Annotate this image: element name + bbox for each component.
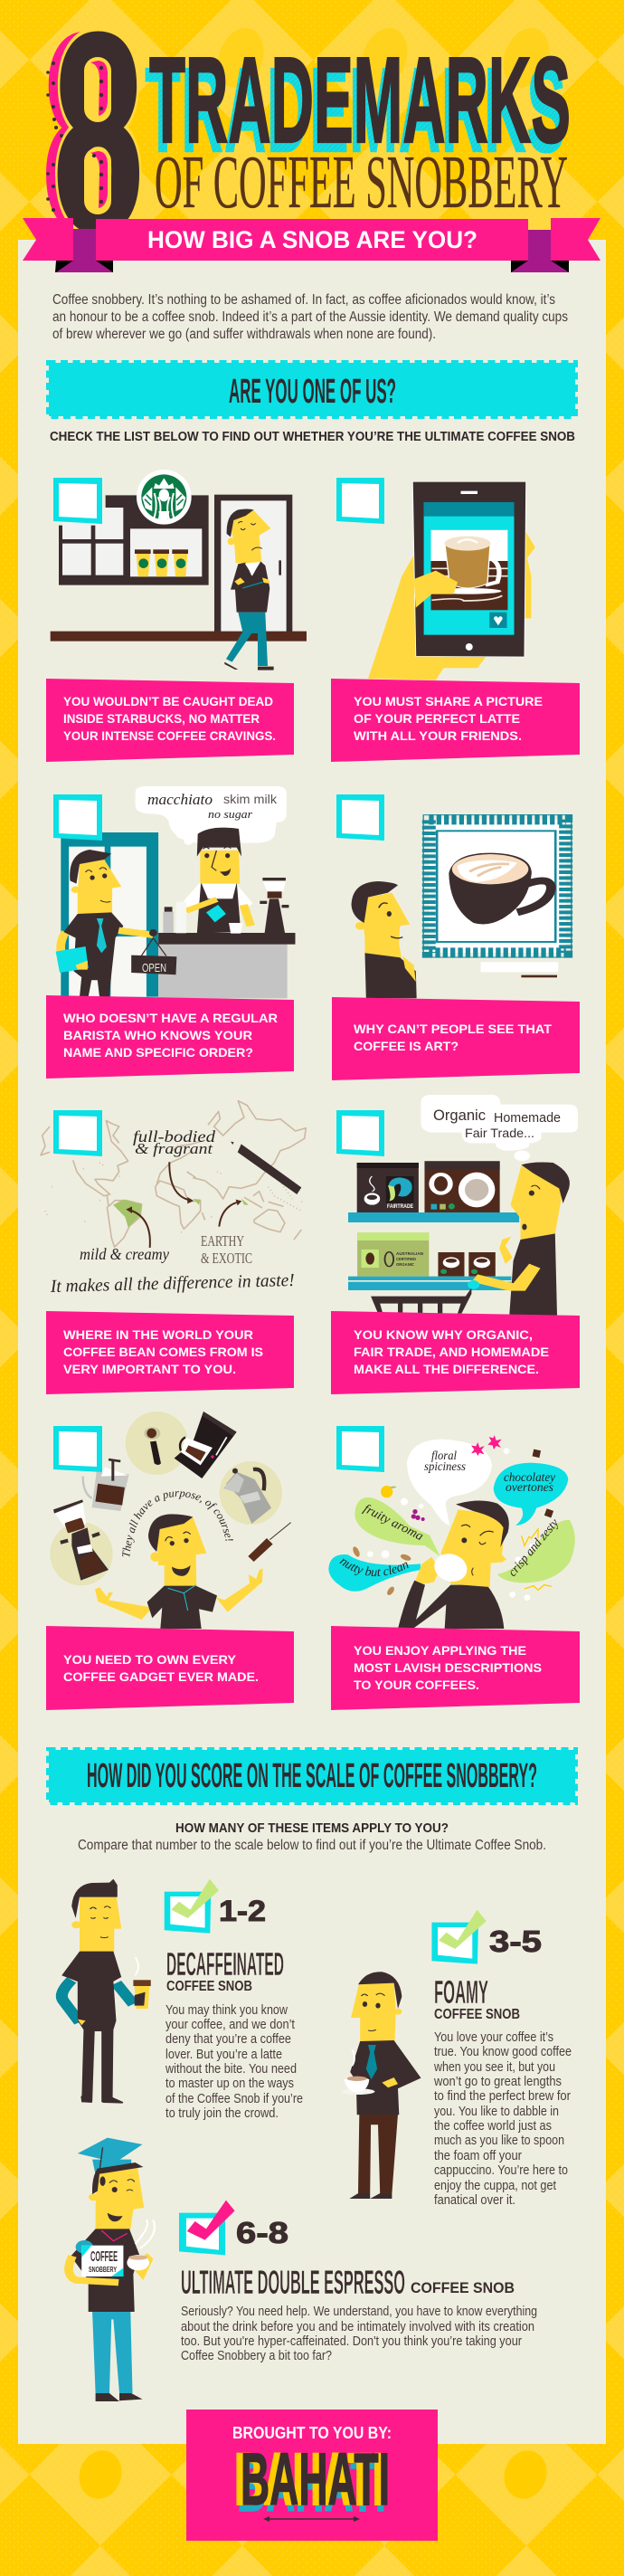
heading stamp: score scale [49, 1750, 575, 1802]
illustration: world map with coffee origins: EARTHY [201, 1232, 244, 1250]
bahati logo: BAHATI [241, 2438, 390, 2521]
caption 4: COFFEE IS ART? [354, 1039, 459, 1053]
illustration: barista and regular customer [56, 786, 295, 998]
score 1-2: without the bite. You need [165, 2061, 297, 2077]
checkboxes row 3 [53, 1110, 384, 1156]
score 3-5: you. You like to dabble in [434, 2104, 559, 2119]
illustration: organic and fair trade shelves: Organic [433, 1107, 486, 1124]
score 3-5: true. You know good coffee [434, 2044, 572, 2059]
illustration: barista and regular customer: OPEN [142, 961, 166, 974]
caption 4: WHY CAN’T PEOPLE SEE THAT [354, 1022, 552, 1036]
score 6-8: about the drink before you and be intimately involved with its creation [181, 2319, 534, 2334]
caption 2: YOU MUST SHARE A PICTURE [354, 694, 543, 708]
caption 3: WHO DOESN’T HAVE A REGULAR [63, 1011, 278, 1025]
score 6-8: COFFEE SNOB [411, 2279, 515, 2296]
score 1-2: You may think you know [165, 2002, 288, 2018]
illustration: organic and fair trade shelves: FAIRTRADE [387, 1204, 413, 1210]
caption 3: BARISTA WHO KNOWS YOUR [63, 1028, 252, 1042]
score 3-5: when you see it, but you [433, 2059, 555, 2075]
illustration: world map with coffee origins [41, 1101, 306, 1297]
arrow under logo [263, 2516, 360, 2522]
caption 8: YOU ENJOY APPLYING THE [354, 1643, 526, 1658]
score 6-8 [179, 2201, 537, 2363]
bahati logo [234, 2438, 390, 2527]
bahati logo: BAHATI [234, 2438, 383, 2521]
caption 2: WITH ALL YOUR FRIENDS. [354, 728, 522, 743]
score 1-2: 1-2 [219, 1895, 266, 1927]
caption 2 [331, 679, 580, 762]
character: decaffeinated snob [61, 1879, 151, 2104]
character: foamy snob [342, 1972, 421, 2199]
illustration: organic and fair trade shelves: ORGANIC [396, 1262, 415, 1267]
illustration: lavish flavor descriptions: spiciness [424, 1460, 466, 1474]
score 1-2: deny that you’re a coffee [165, 2031, 291, 2047]
caption 1: YOU WOULDN’T BE CAUGHT DEAD [63, 694, 273, 708]
icon: tick box 3-5 [431, 1910, 487, 1964]
illustration: latte art in frame [352, 815, 572, 998]
caption 5: VERY IMPORTANT TO YOU. [63, 1362, 236, 1376]
caption 6: MAKE ALL THE DIFFERENCE. [354, 1362, 539, 1376]
score 1-2: of the Coffee Snob if you’re [165, 2091, 303, 2106]
caption 8: TO YOUR COFFEES. [354, 1678, 479, 1692]
scale intro: HOW MANY OF THESE ITEMS APPLY TO YOU? [175, 1820, 449, 1836]
heading stamp: are you one of us [49, 362, 575, 416]
score 3-5: the foam off your [434, 2148, 522, 2163]
illustration: barista and regular customer: no sugar [208, 807, 253, 821]
score 3-5: FOAMY [434, 1973, 488, 2010]
checkboxes row 2 [53, 794, 384, 841]
score 6-8: too. But you're hyper-caffeinated. Don't you think you’re taking your [181, 2334, 522, 2349]
caption 7: YOU NEED TO OWN EVERY [63, 1652, 237, 1667]
caption 4 [332, 997, 580, 1080]
score 3-5: the coffee world just as [434, 2118, 552, 2134]
score 1-2: to truly join the crowd. [165, 2105, 279, 2121]
caption 1: INSIDE STARBUCKS, NO MATTER [63, 711, 260, 726]
illustration: organic and fair trade shelves: Homemade [494, 1110, 561, 1126]
score 3-5: 3-5 [489, 1925, 542, 1958]
character: ultimate double espresso snob: COFFEE [90, 2249, 118, 2265]
caption 3: NAME AND SPECIFIC ORDER? [63, 1045, 253, 1060]
caption 5: COFFEE BEAN COMES FROM IS [63, 1345, 263, 1359]
illustration: world map with coffee origins: It makes all the difference in taste! [50, 1270, 295, 1297]
icon: pink tick box 6-8 [179, 2201, 235, 2255]
score 6-8: Coffee Snobbery a bit too far? [181, 2348, 332, 2363]
illustration: world map with coffee origins: & fragrant [135, 1140, 213, 1157]
footer: brought to you by: BROUGHT TO YOU BY: [232, 2424, 392, 2442]
caption 6 [331, 1311, 580, 1394]
score 1-2: to master up on the ways [165, 2076, 294, 2091]
score 3-5: to find the perfect brew for [434, 2088, 571, 2104]
score 1-2: your coffee, and we don’t [165, 2017, 296, 2032]
illustration: phone latte photo [368, 481, 535, 680]
illustration: world map with coffee origins: full-bodied [133, 1127, 216, 1145]
illustration: lavish flavor descriptions: floral [431, 1450, 457, 1463]
score 3-5 [431, 1910, 572, 2208]
illustration: barista and regular customer: macchiato [147, 791, 213, 808]
illustration: lavish flavor descriptions: fruity aroma [361, 1502, 425, 1544]
scale intro [78, 1820, 546, 1853]
illustration: world map with coffee origins: mild & creamy [80, 1245, 169, 1263]
intro text: Coffee snobbery. It’s nothing to be ashamed of. In fact, as coffee aficionados would know, it’s [52, 292, 555, 308]
caption 5 [46, 1311, 294, 1394]
illustration: juggling coffee gadgets: They all have a purpose, of course! [122, 1491, 233, 1557]
illustration: organic and fair trade shelves: Fair Trade... [465, 1126, 534, 1140]
illustration: lavish flavor descriptions: chocolatey [504, 1471, 556, 1485]
ribbon banner [23, 218, 600, 272]
intro text: of brew wherever we go (and suffer withdrawals when none are found). [52, 327, 436, 342]
caption 6: YOU KNOW WHY ORGANIC, [354, 1327, 533, 1342]
footer: brought to you by [186, 2410, 438, 2541]
checkboxes row 1 [53, 478, 384, 524]
illustration: organic and fair trade shelves: CERTIFIED [396, 1257, 417, 1261]
score 1-2: DECAFFEINATED [166, 1945, 284, 1982]
caption 2: OF YOUR PERFECT LATTE [354, 711, 520, 726]
check list instruction: CHECK THE LIST BELOW TO FIND OUT WHETHER YOU’RE THE ULTIMATE COFFEE SNOB [50, 430, 575, 444]
checkboxes row 4 [53, 1426, 384, 1472]
illustration: starbucks storefront [51, 470, 307, 670]
score 3-5: fanatical over it. [434, 2192, 515, 2208]
character: ultimate double espresso snob: SNOBBERY [89, 2266, 117, 2274]
bahati logo: BAHATI [237, 2445, 386, 2527]
icon: tick box 1-2 [165, 1879, 219, 1934]
character: ultimate double espresso snob [69, 2138, 155, 2401]
caption 7: COFFEE GADGET EVER MADE. [63, 1669, 259, 1684]
illustration: juggling coffee gadgets [50, 1412, 291, 1629]
score 1-2: COFFEE SNOB [166, 1979, 252, 1994]
illustration: lavish flavor descriptions [328, 1435, 575, 1629]
score 3-5: much as you like to spoon [434, 2133, 564, 2148]
caption 8: MOST LAVISH DESCRIPTIONS [354, 1660, 542, 1675]
ribbon banner: HOW BIG A SNOB ARE YOU? [147, 226, 477, 253]
illustration: organic and fair trade shelves [348, 1095, 578, 1316]
intro text [52, 292, 568, 342]
score 6-8: Seriously? You need help. We understand, you have to know everything [181, 2304, 537, 2319]
caption 1: YOUR INTENSE COFFEE CRAVINGS. [63, 728, 276, 743]
illustration: lavish flavor descriptions: nutty but clean [340, 1558, 409, 1576]
illustration: lavish flavor descriptions: overtones [506, 1481, 554, 1495]
illustration: barista and regular customer: skim milk [223, 792, 278, 806]
illustration: world map with coffee origins: & EXOTIC [201, 1250, 252, 1267]
score 3-5: You love your coffee it’s [434, 2029, 553, 2045]
caption 8 [331, 1626, 580, 1710]
score 3-5: enjoy the cuppa, not get [434, 2178, 557, 2193]
scale intro: Compare that number to the scale below to find out if you’re the Ultimate Coffee Snob. [78, 1838, 546, 1853]
caption 3 [46, 995, 294, 1079]
illustration: organic and fair trade shelves: AUSTRALIAN [396, 1251, 423, 1256]
caption 1 [46, 679, 294, 762]
score 3-5: COFFEE SNOB [434, 2007, 520, 2022]
heading stamp: are you one of us: ARE YOU ONE OF US? [229, 373, 396, 411]
score 3-5: won’t go to great lengths [433, 2074, 562, 2089]
caption 6: FAIR TRADE, AND HOMEMADE [354, 1345, 549, 1359]
score 1-2 [165, 1879, 303, 2121]
score 1-2: lover. But you’re a latte [165, 2047, 282, 2062]
caption 5: WHERE IN THE WORLD YOUR [63, 1327, 253, 1342]
illustration: lavish flavor descriptions: crisp and zesty [506, 1516, 563, 1580]
caption 7 [46, 1626, 294, 1710]
score 6-8: 6-8 [236, 2216, 288, 2249]
score 3-5: cappuccino. You’re here to [434, 2163, 568, 2178]
